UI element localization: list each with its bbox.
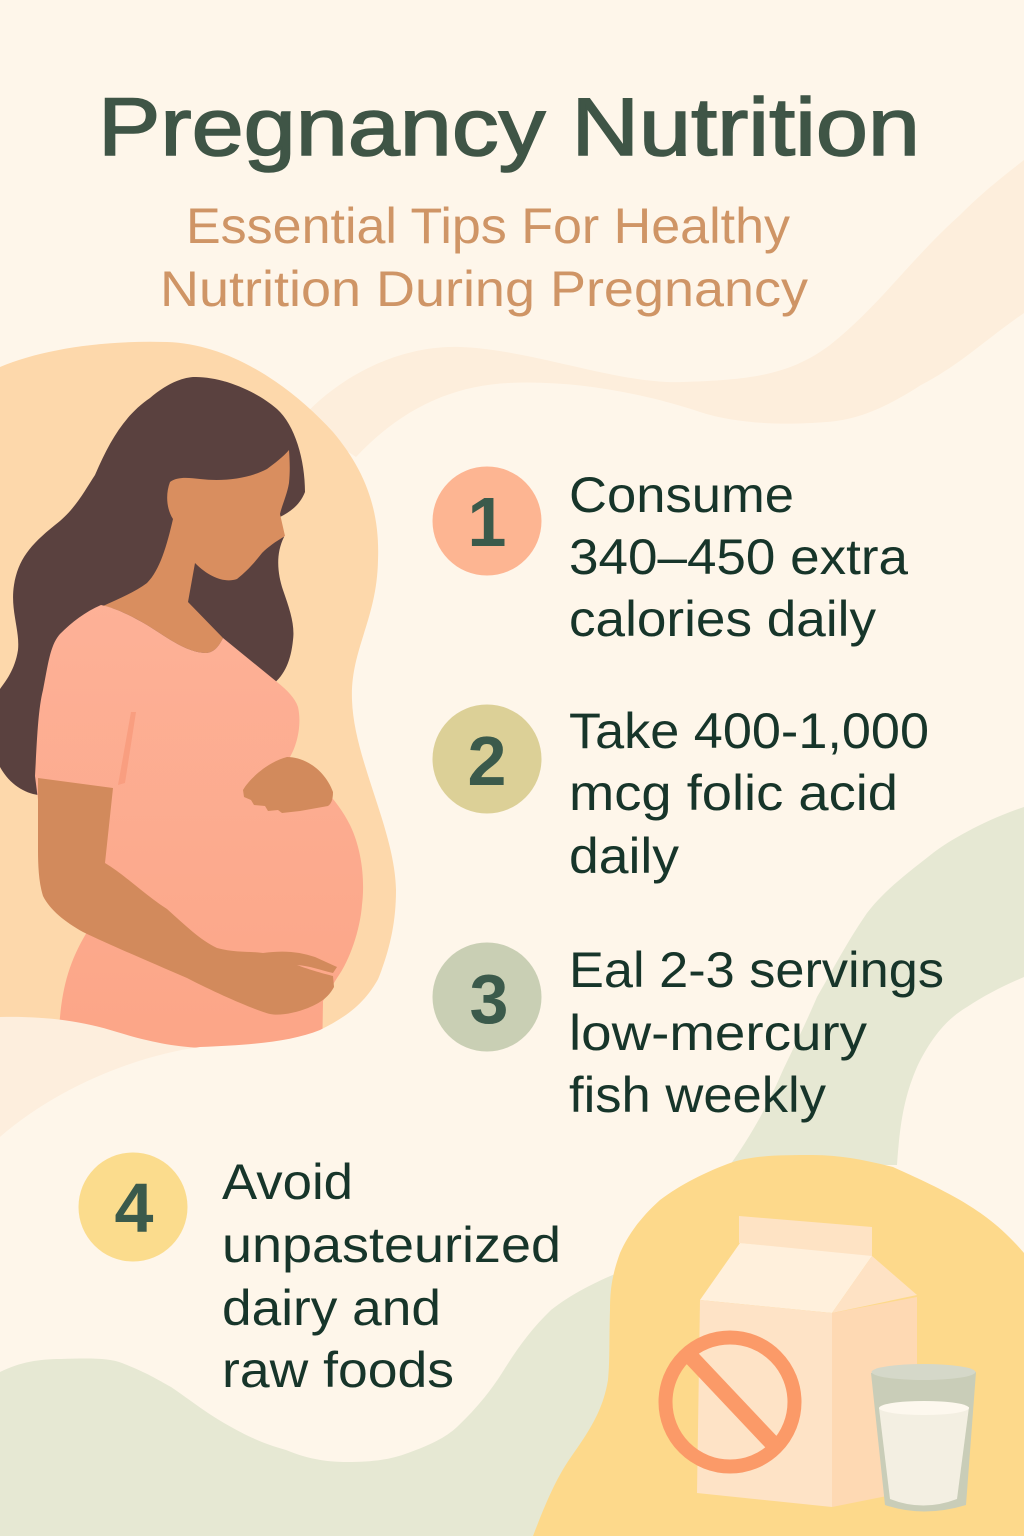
face and neck bbox=[103, 450, 290, 653]
background shape: right green band bbox=[730, 807, 1024, 1165]
tip 3 text bbox=[569, 942, 944, 1123]
tip 3 text: Eal 2-3 servings bbox=[569, 942, 944, 998]
tip 3 text: fish weekly bbox=[569, 1067, 826, 1123]
tip 4 bbox=[78, 1152, 561, 1398]
tip 2 text: Take 400-1,000 bbox=[569, 703, 929, 759]
tip 4 text: unpasteurized bbox=[222, 1217, 561, 1273]
tip 1 text bbox=[569, 467, 908, 647]
tip 2 text: mcg folic acid bbox=[569, 765, 898, 821]
illustration: pregnant woman bbox=[0, 377, 363, 1060]
background band: lower left peach wave bbox=[0, 1017, 205, 1137]
tip 2 bbox=[432, 703, 929, 884]
tip 3 bbox=[432, 942, 944, 1123]
background swoosh: top right peach band bbox=[300, 160, 1024, 457]
subtitle: Nutrition During Pregnancy bbox=[160, 261, 808, 317]
number badge 2: 2 bbox=[468, 722, 506, 800]
hair bbox=[0, 377, 305, 800]
number badge 4: 4 bbox=[115, 1169, 154, 1247]
icon: prohibition sign bbox=[666, 1338, 794, 1466]
tip 4 text: Avoid bbox=[222, 1154, 353, 1210]
background shape: lower green wave bbox=[0, 1272, 620, 1536]
number badge 3: 3 bbox=[470, 960, 508, 1038]
tip 1 bbox=[432, 466, 908, 647]
number badge 3 bbox=[432, 942, 542, 1052]
background shape: yellow blob behind milk bbox=[533, 1155, 1024, 1536]
upper hand bbox=[243, 757, 333, 813]
tip 4 text: raw foods bbox=[222, 1342, 454, 1398]
tip 4 text: dairy and bbox=[222, 1280, 441, 1336]
tip 3 text: low-mercury bbox=[569, 1005, 867, 1061]
lower arm and hand bbox=[38, 778, 337, 1015]
background: cream wave under figure bbox=[0, 965, 420, 1142]
tip 1 text: calories daily bbox=[569, 591, 876, 647]
icon: glass of milk bbox=[871, 1364, 976, 1512]
dress bbox=[35, 605, 363, 1060]
tip 1 text: Consume bbox=[569, 467, 794, 523]
tip 1 text: 340–450 extra bbox=[569, 529, 908, 585]
number badge 1: 1 bbox=[468, 483, 506, 561]
tip 2 text: daily bbox=[569, 828, 679, 884]
sleeve fold bbox=[118, 712, 136, 785]
tip 2 text bbox=[569, 703, 929, 884]
background shape: peach blob behind woman bbox=[0, 342, 396, 1060]
number badge 2 bbox=[432, 704, 542, 814]
subtitle bbox=[160, 198, 808, 317]
tip 4 text bbox=[222, 1154, 561, 1398]
subtitle: Essential Tips For Healthy bbox=[186, 198, 790, 254]
title: Pregnancy Nutrition bbox=[98, 82, 920, 173]
number badge 4 bbox=[78, 1152, 188, 1262]
number badge 1 bbox=[432, 466, 542, 576]
icon: milk carton bbox=[697, 1216, 917, 1507]
